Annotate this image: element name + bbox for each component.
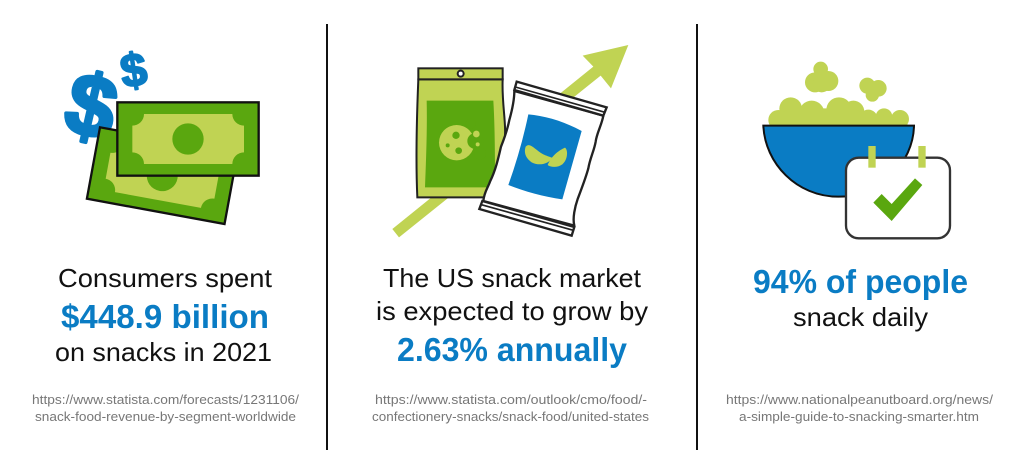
source url <box>372 392 650 424</box>
source url <box>726 392 993 424</box>
heading: consumers spent: on snacks in 2021 <box>55 337 272 367</box>
heading: consumers spent <box>55 263 273 367</box>
icon: snack bowl and calendar <box>763 62 950 238</box>
source url <box>32 392 299 424</box>
icon: snack bags and growth arrow <box>392 45 628 237</box>
source url: https://www.statista.com/forecasts/1231106/ <box>32 392 299 407</box>
heading: daily snacking <box>753 263 968 332</box>
heading: daily snacking: snack daily <box>793 302 928 332</box>
heading: market growth: The US snack market <box>383 263 642 293</box>
source url: https://www.nationalpeanutboard.org/news/ <box>726 392 993 407</box>
heading: daily snacking: 94% of people <box>753 263 968 300</box>
panel: consumer spending <box>32 43 299 424</box>
source url: snack-food-revenue-by-segment-worldwide <box>35 409 296 424</box>
icon: money and dollar signs: $ <box>57 53 126 159</box>
heading: consumers spent: $448.9 billion <box>61 298 269 335</box>
source url: confectionery-snacks/snack-food/united-states <box>372 409 650 424</box>
panel: daily snacking <box>726 62 993 424</box>
panel: market growth <box>372 45 650 424</box>
heading: market growth <box>376 263 648 368</box>
icon: money and dollar signs: $ <box>117 43 150 98</box>
source url: a-simple-guide-to-snacking-smarter.htm <box>739 409 979 424</box>
heading: market growth: 2.63% annually <box>397 331 628 368</box>
icon: money and dollar signs <box>57 43 259 224</box>
heading: consumers spent: Consumers spent <box>58 263 273 293</box>
heading: market growth: is expected to grow by <box>376 296 648 326</box>
source url: https://www.statista.com/outlook/cmo/food/- <box>375 392 647 407</box>
